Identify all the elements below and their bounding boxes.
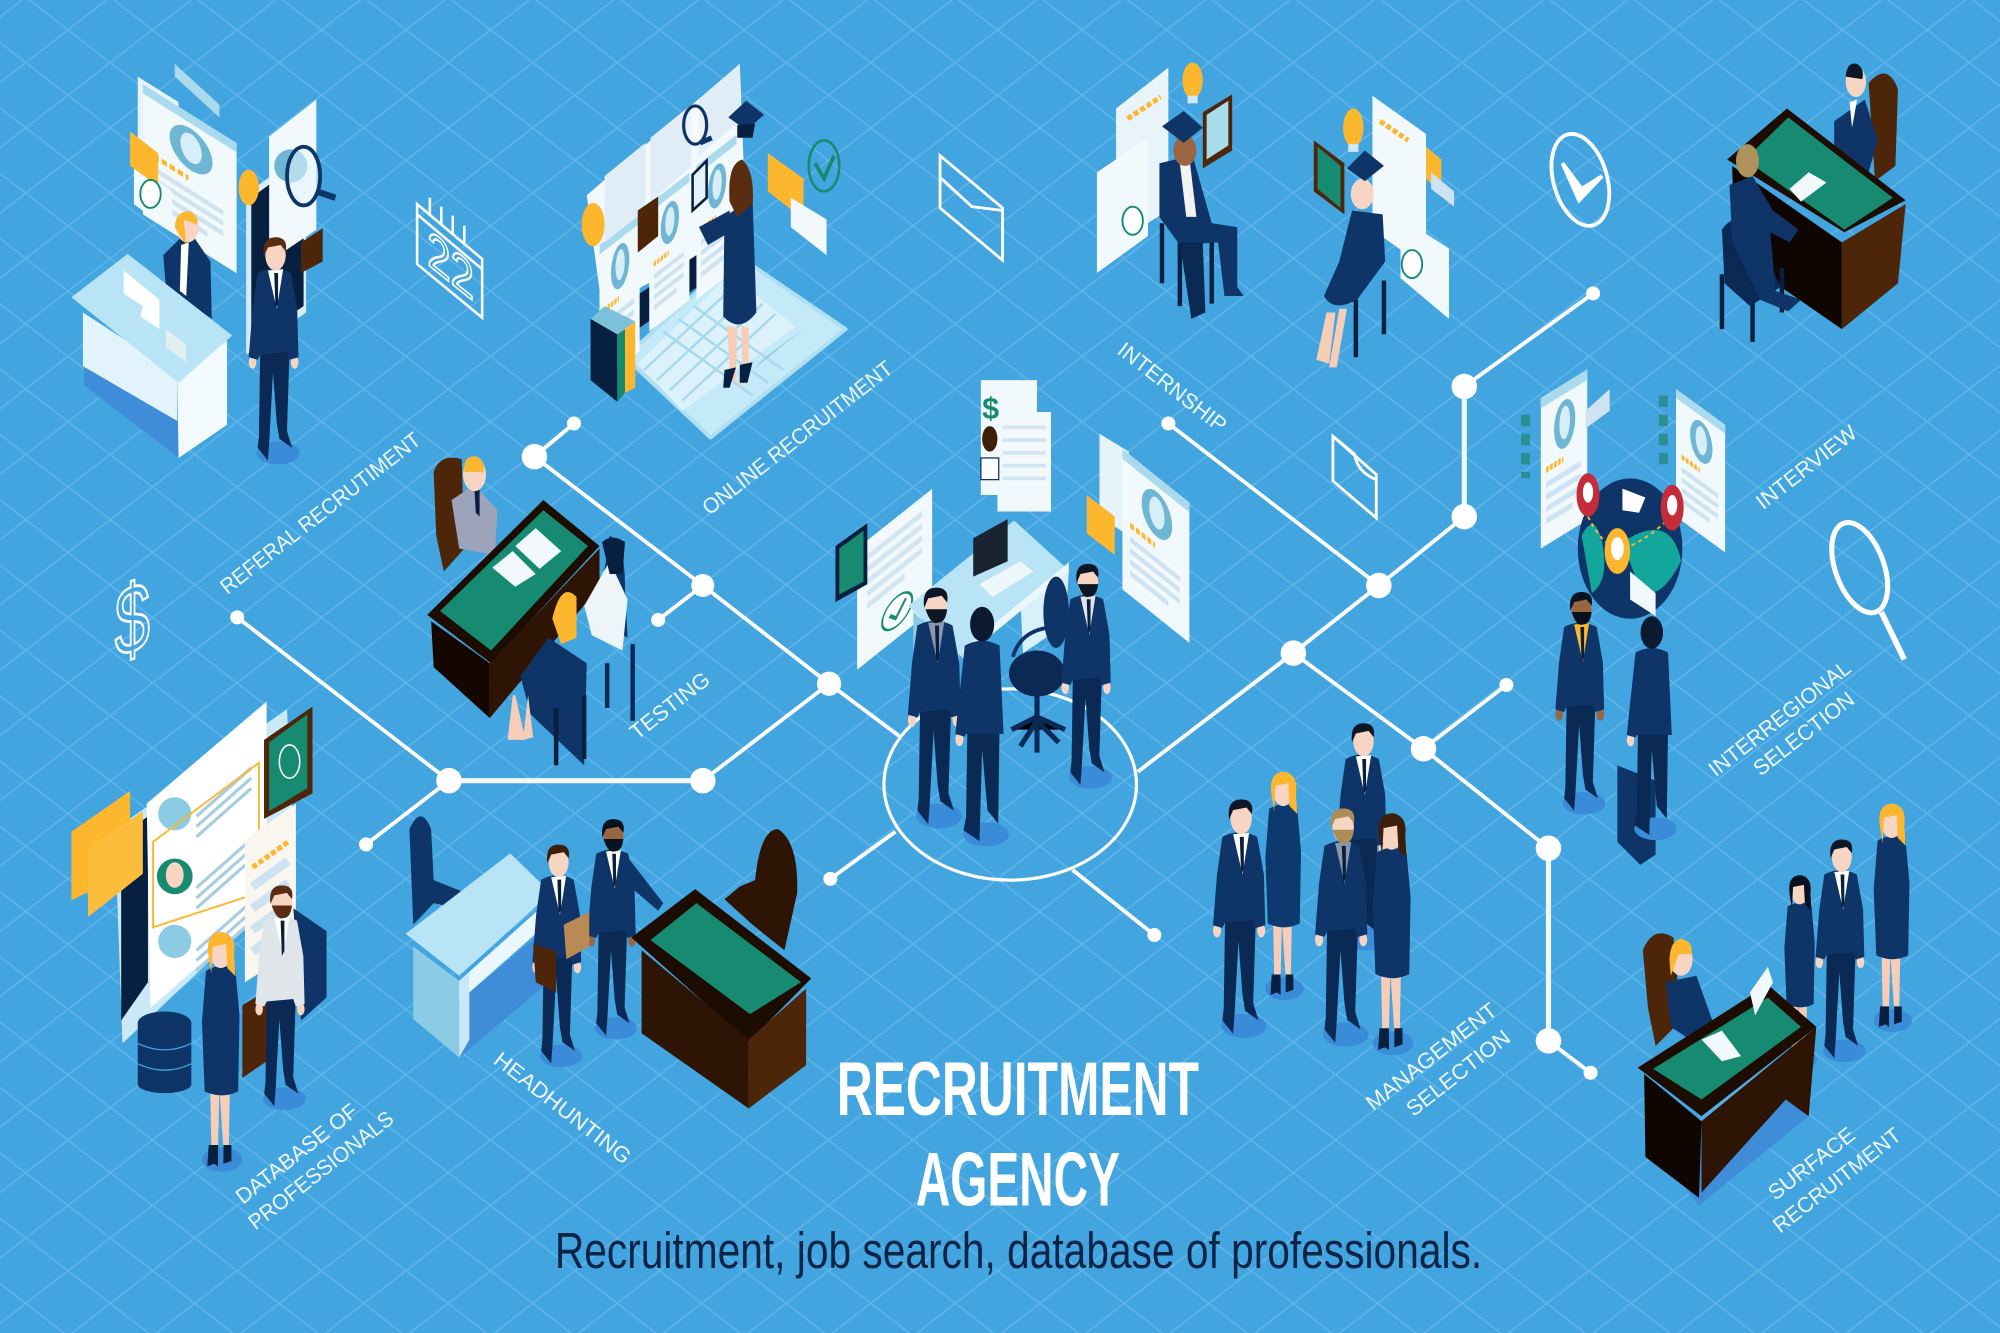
two men with box [532, 819, 663, 1067]
documents stack [981, 380, 1051, 512]
label: testing: TESTING [625, 667, 715, 744]
bulb [1182, 63, 1203, 103]
brown chair [724, 829, 797, 950]
scene: online recruitment [582, 64, 846, 438]
office chair [1009, 577, 1069, 753]
scene: interview [1722, 63, 1907, 342]
database cylinder [138, 1012, 191, 1093]
seated candidate [1722, 144, 1801, 342]
label: management selection: MANAGEMENT [1361, 997, 1502, 1115]
label: online recruitment: ONLINE RECRUITMENT [697, 356, 897, 520]
tablet [1314, 140, 1344, 214]
paper stack [1372, 96, 1454, 319]
green desk [427, 500, 599, 718]
folder, check, envelope [768, 140, 839, 255]
scene: headhunting [406, 816, 811, 1108]
label: surface recruitment: SURFACE [1763, 1122, 1860, 1205]
manager and chair [1834, 63, 1898, 181]
flow network lines [237, 293, 1593, 1073]
network nodes [230, 286, 1600, 1080]
icon: folder [1333, 436, 1376, 518]
icon: magnifier [1821, 515, 1904, 659]
cv papers [130, 64, 237, 273]
globe [1577, 473, 1684, 619]
central ring [884, 689, 1136, 880]
seated graduate [1159, 111, 1244, 319]
receptionist [163, 211, 212, 319]
subtitle: Recruitment, job search, database of professionals. [555, 1222, 1482, 1279]
icon: check circle [1542, 127, 1619, 233]
seated graduate [1316, 151, 1385, 367]
scene: management selection [1213, 723, 1413, 1055]
label: interregional selection: INTERREGIONAL [1703, 655, 1855, 782]
orange folders [71, 791, 143, 917]
documents stack: $ [982, 391, 999, 425]
office desk [908, 519, 1069, 727]
big panel [115, 702, 296, 1043]
light desk [406, 853, 551, 1057]
icon: calendar: 22 [427, 218, 474, 313]
bulb [1343, 108, 1364, 152]
label: referral: REFERAL RECRUTIMENT [215, 427, 425, 599]
scene: internship graduate woman [1314, 96, 1454, 367]
label: interview: INTERVIEW [1751, 420, 1862, 514]
scene: interregional selection [1526, 369, 1725, 865]
green desk [1638, 967, 1816, 1205]
label: database of professionals: DATABASE OF [231, 1098, 362, 1209]
reception desk [71, 254, 232, 458]
title [837, 1047, 1199, 1222]
scene: internship graduate man [1097, 63, 1244, 319]
handshake men [1555, 592, 1677, 865]
seated man in grey [452, 456, 497, 555]
label: surface recruitment: RECRUITMENT [1768, 1122, 1906, 1238]
man and woman [202, 885, 306, 1172]
checklist [245, 804, 296, 982]
checklist left [835, 489, 932, 670]
magnifier, cap, tablet, briefcase [638, 101, 764, 253]
tablet [264, 707, 312, 819]
title: RECRUITMENT [837, 1047, 1199, 1132]
scene: referral recruitment [71, 64, 335, 464]
screen panels [582, 64, 746, 383]
cv cards [1526, 369, 1725, 552]
green desk [631, 889, 811, 1108]
scene: central team [835, 380, 1189, 846]
cv right [1087, 434, 1189, 643]
label: internship: INTERNSHIP [1113, 337, 1232, 437]
paper stack [1097, 68, 1168, 273]
green desk [1727, 108, 1907, 329]
title: AGENCY [916, 1137, 1120, 1222]
scene: surface recruitment [1638, 804, 1912, 1205]
label: management selection: SELECTION [1401, 1025, 1515, 1121]
woman at laptop [699, 159, 756, 388]
brown chair [434, 458, 464, 571]
icon: envelope [940, 156, 1003, 260]
label: headhunting: HEADHUNTING [489, 1047, 636, 1169]
binders [591, 306, 635, 402]
scene: testing [427, 456, 633, 765]
tablet [1203, 94, 1232, 168]
laptop base [625, 255, 846, 438]
label: interregional selection: SELECTION [1748, 686, 1859, 781]
three businessmen [908, 564, 1112, 846]
label: database of professionals: PROFESSIONALS [243, 1106, 398, 1235]
icon: calendar [417, 198, 482, 318]
phone with magnifier [239, 100, 335, 355]
icon: dollar: $ [115, 559, 150, 679]
brown chair and clerk [1643, 933, 1717, 1046]
three standing staff [1784, 804, 1912, 1069]
scene: database of professionals [71, 702, 327, 1172]
seated women [508, 536, 633, 765]
recruiter man [249, 237, 300, 464]
navy chair [409, 816, 466, 925]
binders [293, 908, 327, 1020]
